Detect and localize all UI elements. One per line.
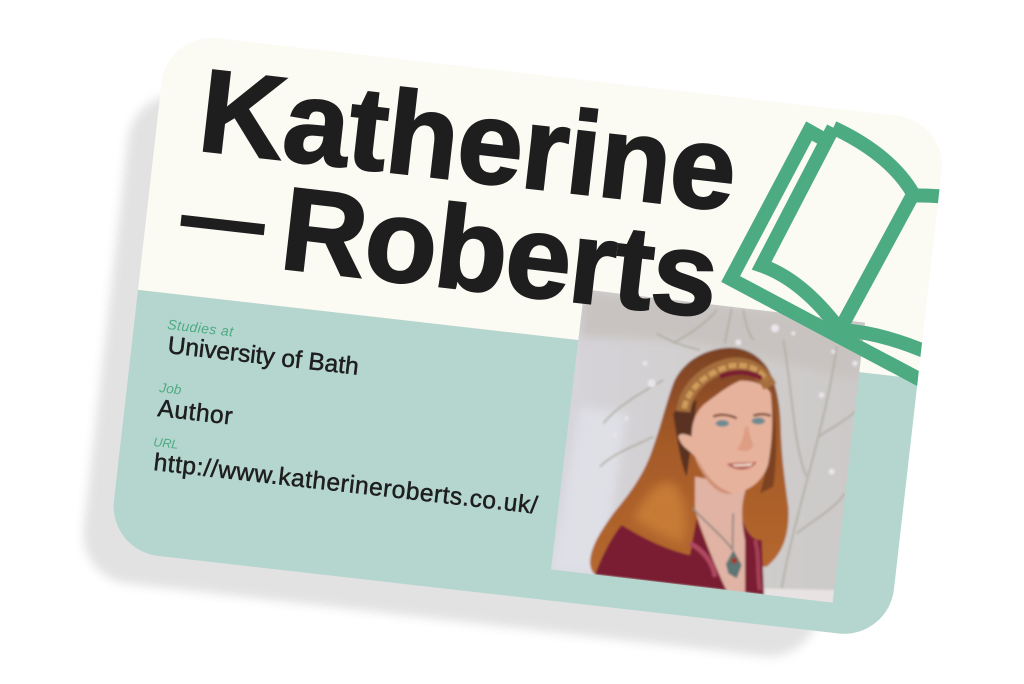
neck and chest [695,477,747,593]
panel: teal details [97,289,928,650]
details [152,316,539,520]
value: Author: Author [156,395,234,430]
eyes and mouth [713,414,771,470]
necklace [693,508,742,578]
label: Studies at: Studies at [167,316,235,340]
label: URL: URL [153,435,179,452]
dress [595,518,727,591]
hair [590,348,789,575]
face [678,381,772,493]
name heading [178,45,744,343]
dash: — [178,170,269,269]
value: University of Bath: University of Bath [166,332,360,381]
bare trees [600,308,855,588]
surname: Roberts [275,163,725,343]
card shadow [78,89,869,662]
card body [97,22,958,650]
label: Job: Job [158,380,183,398]
panel: cream header [128,22,958,380]
headband [683,365,770,412]
ID card infographic [80,38,942,659]
first name: Katherine [193,45,744,237]
icon: open book [731,128,953,387]
value: website: http://www.katherineroberts.co.uk/ [152,449,539,520]
photo: portrait [551,290,865,602]
